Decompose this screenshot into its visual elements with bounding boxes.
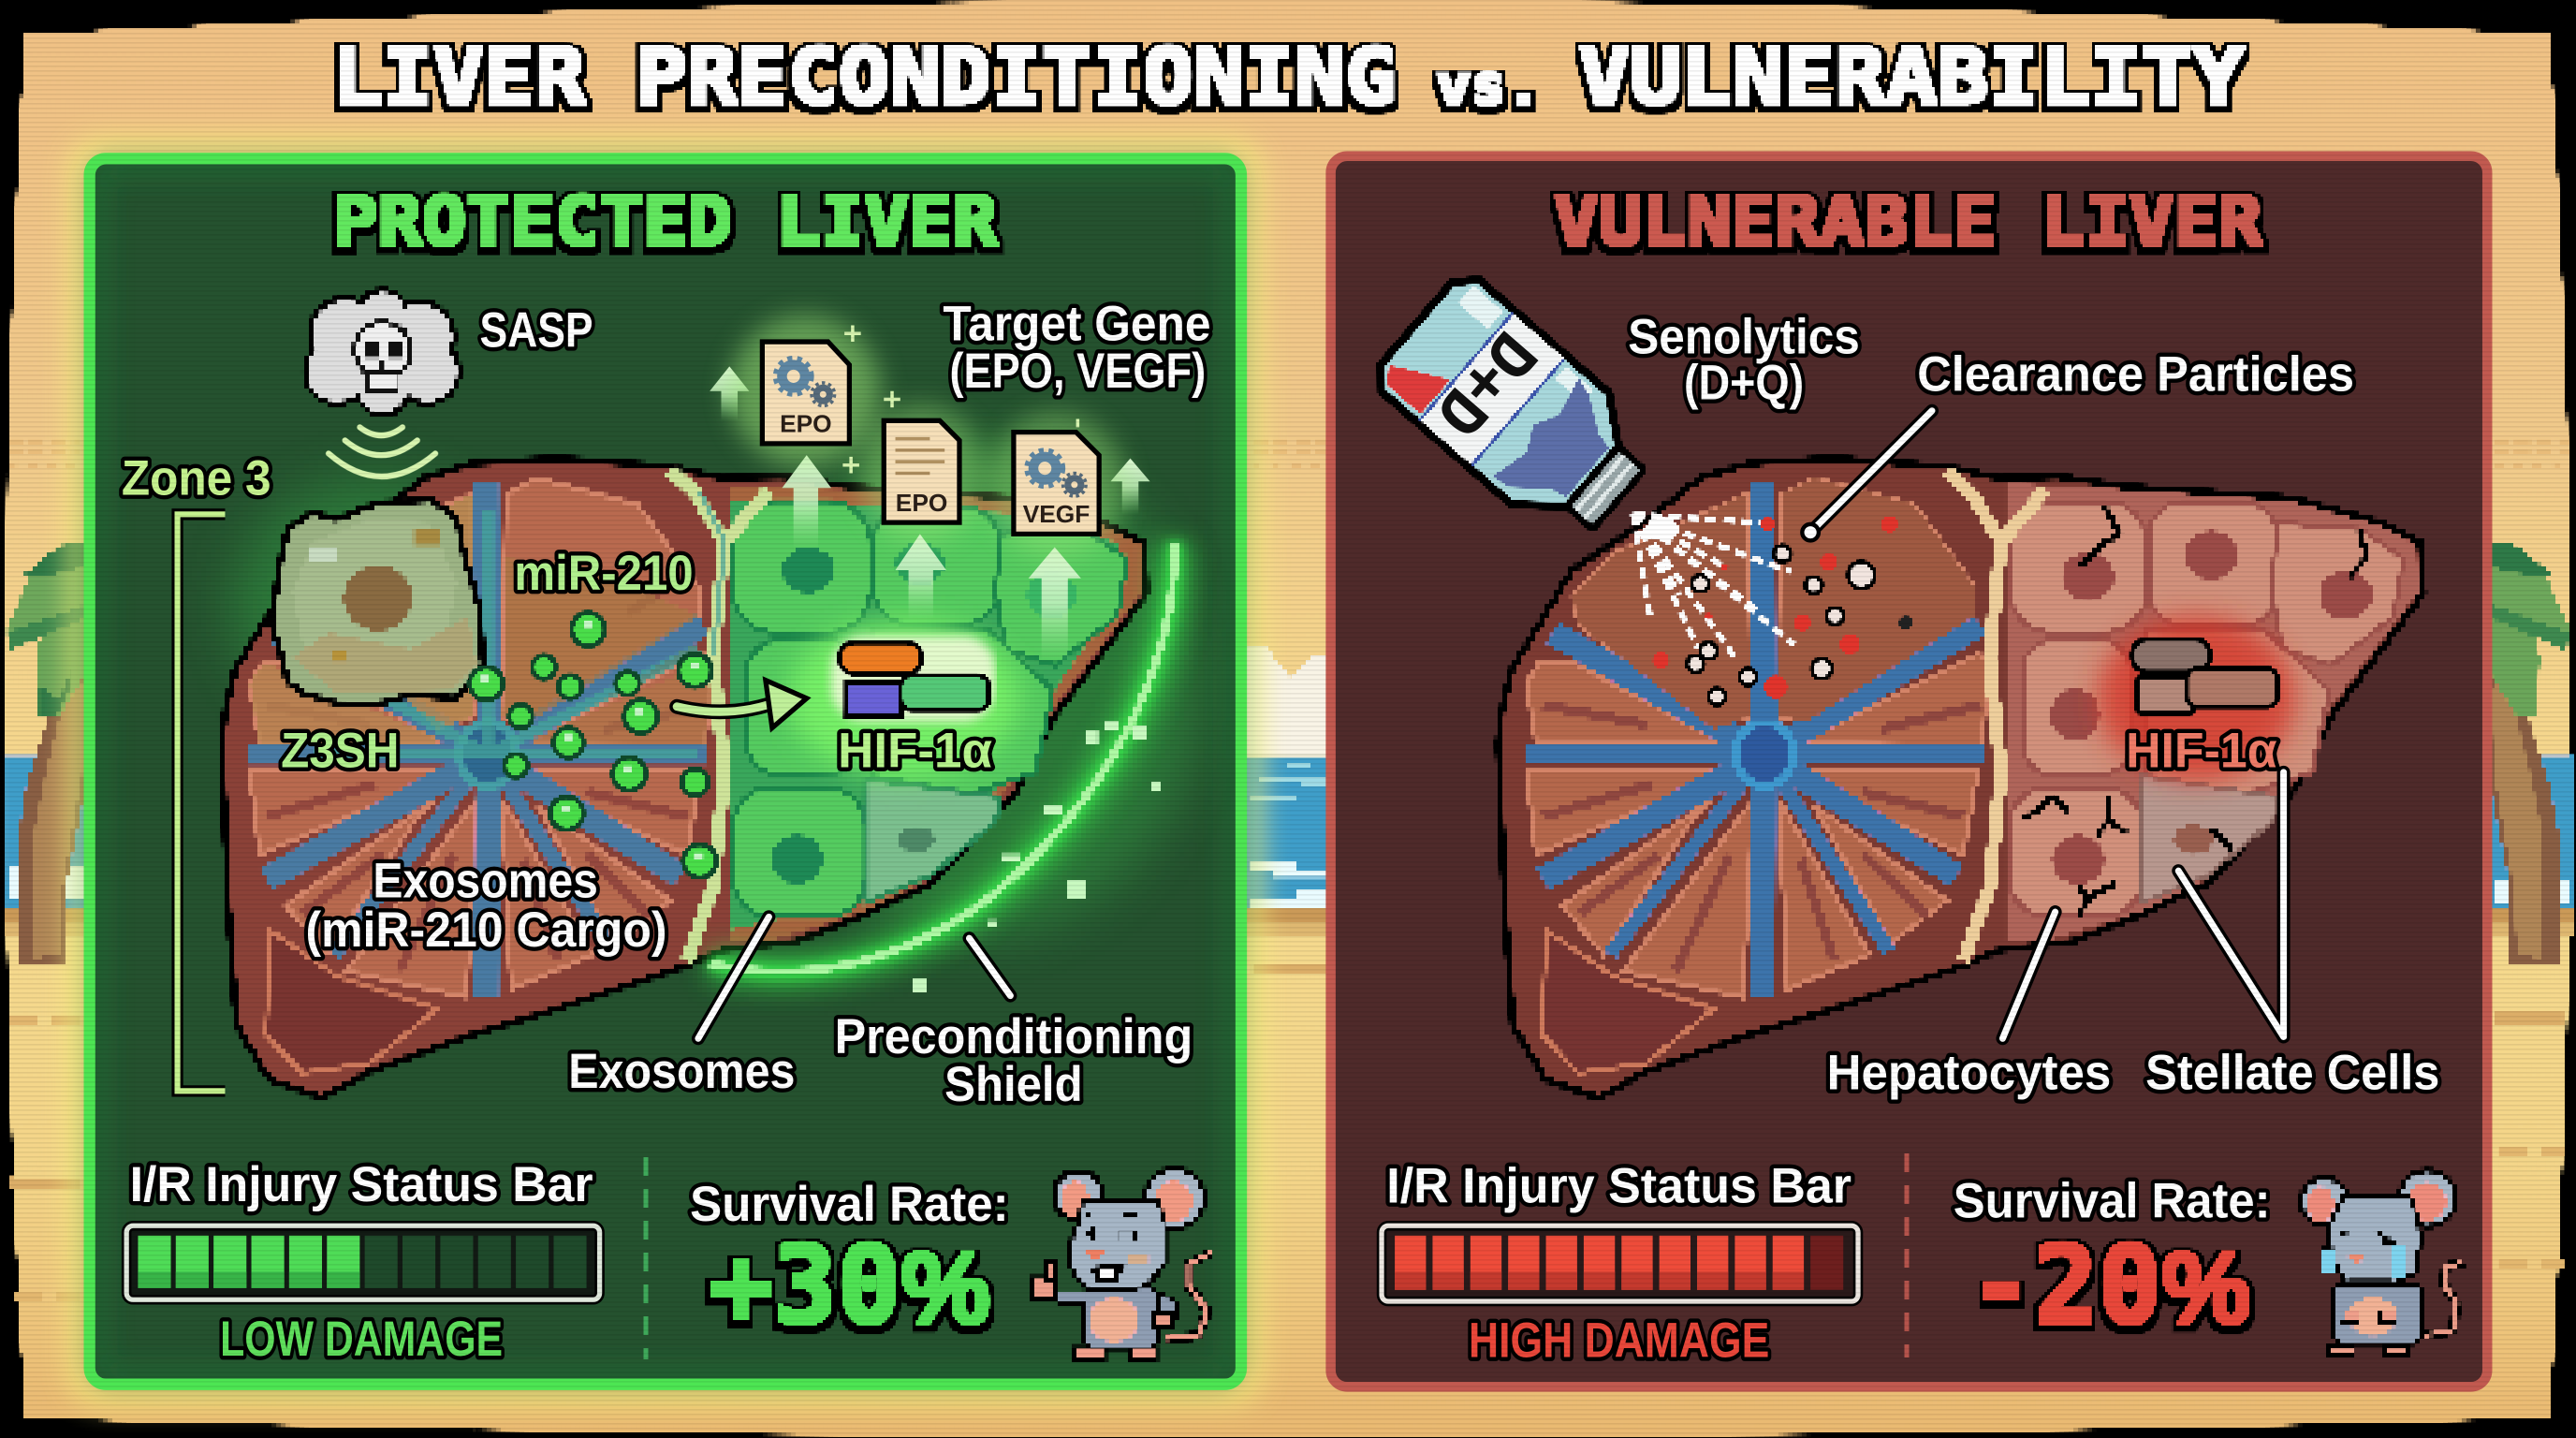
document: EPO with gears: EPO	[780, 410, 832, 438]
survival label vulnerable: Survival Rate:	[1954, 1174, 2271, 1229]
target gene documents	[729, 315, 1125, 557]
HIF complex (protected)	[831, 636, 996, 721]
SASP cloud	[307, 292, 457, 413]
vulnerable liver labels: Hepatocytes	[1827, 1046, 2111, 1101]
cream divider	[670, 470, 768, 961]
divider protected	[644, 1157, 648, 1359]
status bar vulnerable	[1382, 1159, 1858, 1369]
leader lines vulnerable	[1802, 411, 2284, 1038]
panel: protected liver	[77, 146, 1253, 1397]
protected liver labels: Zone 3	[122, 450, 271, 506]
status bar protected: I/R Injury Status Bar	[130, 1157, 593, 1212]
protected liver labels	[122, 296, 1211, 1112]
protected liver labels: HIF-1α	[838, 724, 992, 779]
palm tree left	[7, 542, 95, 966]
green hepatocytes	[729, 487, 1142, 940]
status bar protected: LOW DAMAGE	[220, 1312, 503, 1367]
sea	[7, 756, 2572, 907]
arrow: exosome to HIF	[677, 681, 807, 728]
senescent cell	[271, 500, 483, 705]
document: EPO with lines: EPO	[896, 489, 947, 517]
tinted lobule overlays	[296, 494, 473, 729]
icon: happy mouse thumbs up	[1031, 1168, 1210, 1360]
document: EPO with gears	[762, 342, 849, 444]
icon: inactive HIF complex	[2132, 639, 2277, 713]
document: VEGF: VEGF	[1023, 500, 1090, 528]
protected liver labels: Target Gene	[943, 296, 1211, 351]
vulnerable liver labels	[1628, 309, 2439, 1101]
status bar vulnerable: HIGH DAMAGE	[1469, 1313, 1769, 1369]
cloud white band	[1240, 646, 1339, 756]
heading: vulnerable liver: VULNERABLE LIVER	[1554, 183, 2263, 261]
cracks	[2024, 505, 2367, 916]
protected liver labels: Exosomes	[373, 853, 598, 908]
sand bands	[7, 907, 2572, 923]
spray and clearance particles	[1633, 514, 1912, 705]
heading: protected liver: PROTECTED LIVER	[333, 183, 998, 261]
leader lines protected	[698, 917, 1010, 1038]
protected liver labels: Z3SH	[281, 724, 399, 779]
protected liver illustration	[222, 444, 1199, 1097]
protected liver labels: (miR-210 Cargo)	[305, 902, 667, 958]
title	[332, 33, 2245, 123]
protected liver labels: miR-210	[514, 546, 694, 601]
cream divider	[1947, 470, 2045, 961]
palm tree right	[2481, 542, 2569, 966]
survival value vulnerable: -20%	[1969, 1223, 2250, 1349]
status bar vulnerable: I/R Injury Status Bar	[1386, 1159, 1852, 1214]
panel: vulnerable liver	[1331, 156, 2487, 1387]
title: LIVER PRECONDITIONING	[332, 33, 1397, 123]
brown upper wedges	[1573, 494, 1749, 729]
protected liver labels: Exosomes	[568, 1044, 795, 1099]
title: VULNERABILITY	[1579, 33, 2245, 123]
survival value protected: +30%	[708, 1223, 990, 1349]
vulnerable liver labels: HIF-1α	[2126, 724, 2277, 779]
title: vs.	[1436, 53, 1541, 117]
protected liver labels: Preconditioning	[835, 1009, 1193, 1064]
icon: D+D bottle: D+D	[1422, 317, 1551, 450]
icon: crying mouse	[2301, 1170, 2464, 1356]
document: VEGF	[1014, 433, 1099, 534]
status bar protected	[126, 1157, 600, 1367]
SASP waves	[329, 427, 435, 477]
divider vulnerable	[1904, 1153, 1910, 1357]
protected liver labels: (EPO, VEGF)	[949, 344, 1206, 399]
protected liver labels: Shield	[944, 1057, 1083, 1112]
vulnerable liver illustration	[1499, 459, 2423, 1097]
vulnerable liver labels: Stellate Cells	[2145, 1046, 2439, 1101]
protected liver labels: SASP	[479, 302, 593, 358]
shield ring	[710, 542, 1175, 972]
icon: D+D bottle	[1368, 268, 1667, 555]
upregulation arrows	[710, 366, 1150, 662]
sparkles	[842, 326, 1077, 473]
survival label protected: Survival Rate:	[690, 1177, 1009, 1232]
exosome particles	[470, 613, 716, 877]
vulnerable liver labels: Clearance Particles	[1917, 347, 2354, 403]
Zone 3 bracket	[178, 514, 225, 1091]
dune dither band	[8, 440, 2571, 466]
document: EPO with lines	[884, 420, 959, 522]
vulnerable liver labels: (D+Q)	[1684, 355, 1804, 410]
vulnerable liver labels: Senolytics	[1628, 309, 1860, 364]
damaged hepatocytes	[2006, 483, 2419, 940]
